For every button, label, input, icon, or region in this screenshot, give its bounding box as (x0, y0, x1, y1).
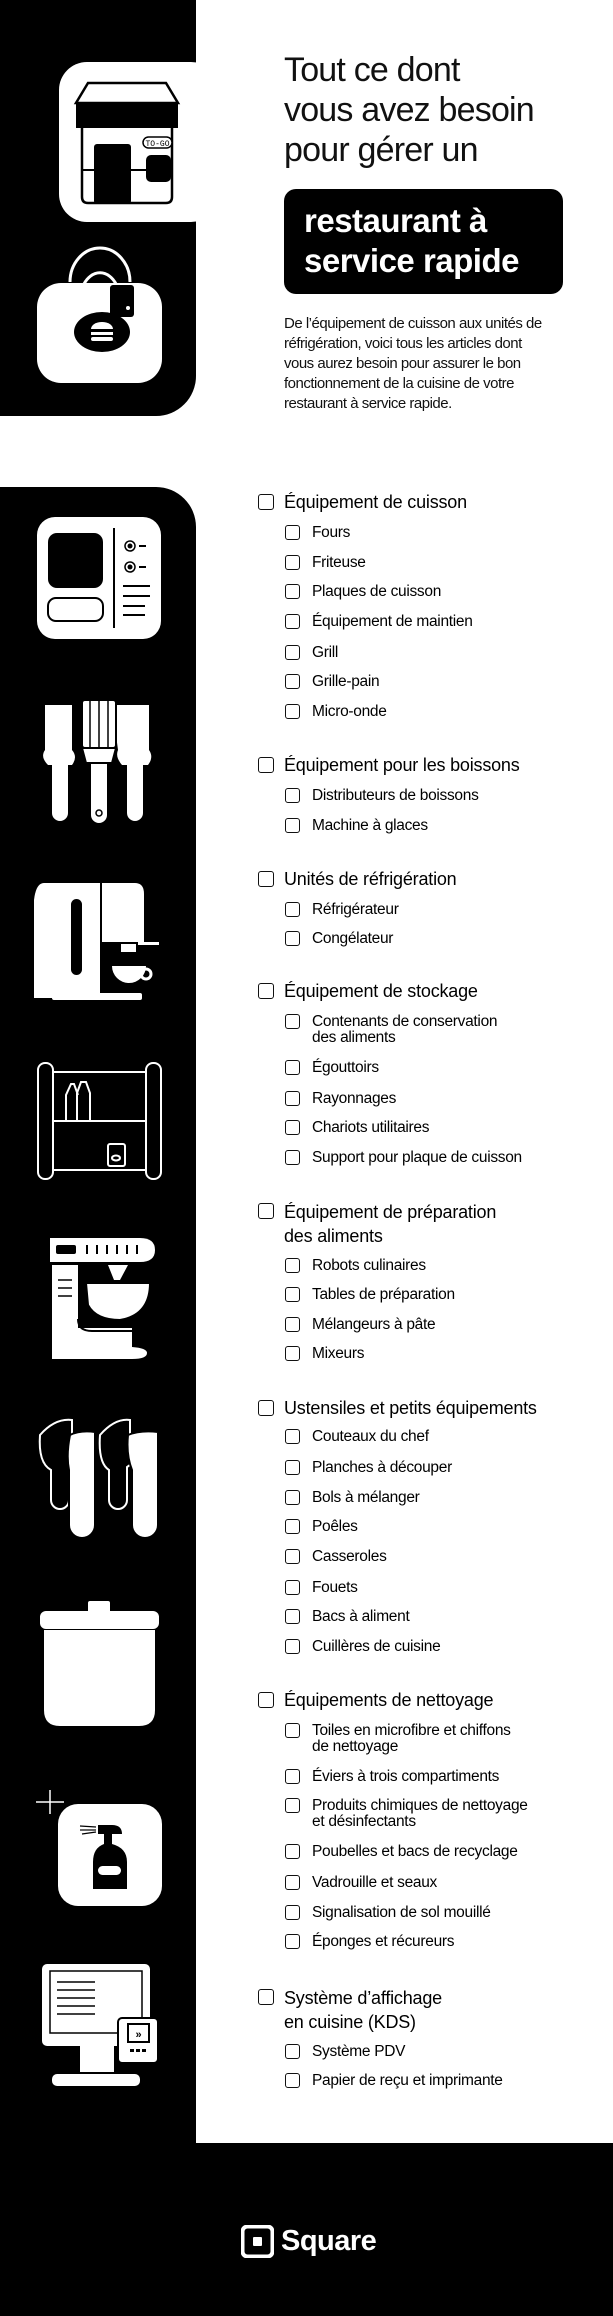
icon: brushes (43, 701, 152, 823)
text: Réfrigérateur (312, 901, 399, 918)
checklist: nettoyage (258, 1690, 528, 1950)
checklist: KDS (258, 1988, 503, 2089)
text: Produits chimiques de nettoyage (312, 1797, 528, 1814)
text: Cuillères de cuisine (312, 1638, 440, 1655)
text: Machine à glaces (312, 817, 428, 834)
intro paragraph: vous aurez besoin pour assurer le bon (284, 355, 521, 372)
icon: knives (38, 1418, 158, 1537)
text: Mixeurs (312, 1345, 364, 1362)
text: Robots culinaires (312, 1257, 426, 1274)
text: Plaques de cuisson (312, 583, 441, 600)
intro paragraph: De l’équipement de cuisson aux unités de (284, 315, 542, 332)
text: Équipement de stockage (284, 981, 478, 1001)
text: Chariots utilitaires (312, 1119, 429, 1136)
icon: stand mixer (50, 1238, 155, 1359)
text: des aliments (312, 1029, 395, 1046)
text: Friteuse (312, 554, 366, 571)
text: Micro-onde (312, 703, 387, 720)
text: Égouttoirs (312, 1059, 379, 1076)
text: Papier de reçu et imprimante (312, 2072, 503, 2089)
title highlight box (284, 189, 563, 294)
text: Support pour plaque de cuisson (312, 1149, 522, 1166)
text: Système PDV (312, 2043, 405, 2060)
text: Toiles en microfibre et chiffons (312, 1722, 511, 1739)
text: Fouets (312, 1579, 358, 1596)
checklist: boissons (258, 755, 520, 834)
text: et désinfectants (312, 1813, 416, 1830)
text: Éviers à trois compartiments (312, 1768, 499, 1785)
intro paragraph: réfrigération, voici tous les articles dont (284, 335, 522, 352)
icon: store: TO-GO (145, 140, 170, 149)
text: Unités de réfrigération (284, 869, 456, 889)
text: Équipement pour les boissons (284, 755, 520, 775)
title (284, 51, 534, 169)
icon: POS / KDS (42, 1964, 157, 2086)
text: Fours (312, 524, 350, 541)
text: Équipements de nettoyage (284, 1690, 493, 1710)
text: Poubelles et bacs de recyclage (312, 1843, 518, 1860)
text: Tables de préparation (312, 1286, 455, 1303)
text: Bacs à aliment (312, 1608, 409, 1625)
text: Grill (312, 644, 338, 661)
text: Poêles (312, 1518, 358, 1535)
text: Équipement de préparation (284, 1202, 496, 1222)
intro paragraph: restaurant à service rapide. (284, 395, 452, 412)
icon: coffee machine (34, 883, 159, 1000)
text: Bols à mélanger (312, 1489, 420, 1506)
footer logo: Square: Square (281, 2225, 376, 2257)
text: Casseroles (312, 1548, 387, 1565)
icon: oven (37, 517, 161, 639)
text: Signalisation de sol mouillé (312, 1904, 491, 1921)
checklist: stockage (258, 981, 522, 1166)
text: Mélangeurs à pâte (312, 1316, 435, 1333)
text: Équipement de maintien (312, 613, 473, 630)
text: Congélateur (312, 930, 393, 947)
text: Planches à découper (312, 1459, 452, 1476)
icon: POS / KDS: » (135, 2029, 142, 2041)
text: Couteaux du chef (312, 1428, 429, 1445)
icon: store (59, 62, 196, 222)
text: Distributeurs de boissons (312, 787, 479, 804)
text: Système d’affichage (284, 1988, 442, 2008)
text: de nettoyage (312, 1738, 398, 1755)
checklist: cuisson (258, 492, 473, 720)
icon: spray bottle (36, 1790, 162, 1906)
checklist: réfrigération (258, 869, 456, 947)
text: Équipement de cuisson (284, 492, 467, 512)
text: Ustensiles et petits équipements (284, 1398, 537, 1418)
intro paragraph: fonctionnement de la cuisine de votre (284, 375, 514, 392)
checklist: ustensiles (258, 1398, 537, 1655)
footer logo: Square (241, 2225, 376, 2258)
intro paragraph (284, 315, 542, 412)
text: Grille-pain (312, 673, 379, 690)
title: Tout ce dont (284, 51, 460, 89)
icon: takeout bag (37, 246, 162, 383)
title: vous avez besoin (284, 91, 534, 129)
checklist: préparation (258, 1202, 496, 1362)
text: Éponges et récureurs (312, 1933, 454, 1950)
icon: pot (40, 1601, 159, 1726)
title highlight box: service rapide (304, 242, 519, 279)
text: Contenants de conservation (312, 1013, 497, 1030)
icon: shelf (37, 1062, 162, 1180)
text: en cuisine (KDS) (284, 2012, 416, 2032)
text: Rayonnages (312, 1090, 396, 1107)
title highlight box: restaurant à (304, 202, 487, 239)
text: Vadrouille et seaux (312, 1874, 437, 1891)
title: pour gérer un (284, 131, 478, 169)
text: des aliments (284, 1226, 383, 1246)
